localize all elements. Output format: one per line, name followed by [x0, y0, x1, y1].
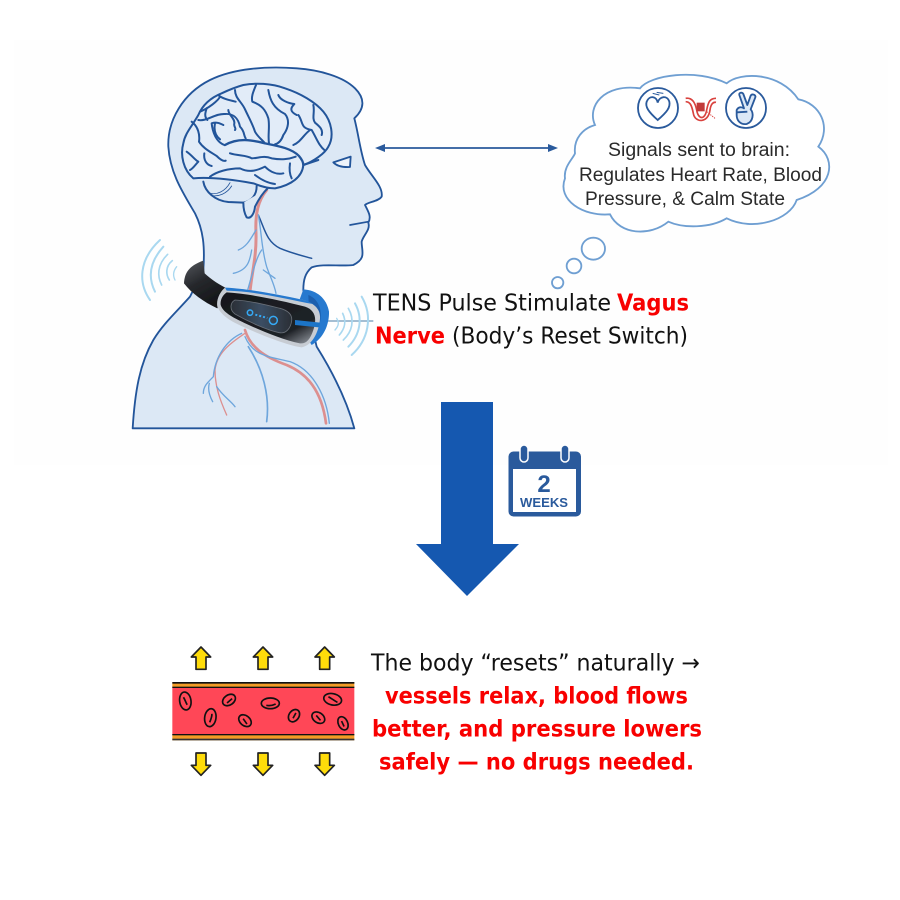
down arrows — [191, 753, 334, 775]
result text: The body “resets” naturally → — [370, 650, 700, 676]
vessel body — [172, 687, 354, 735]
big down arrow — [416, 402, 519, 596]
bubble text: Regulates Heart Rate, Blood — [579, 165, 822, 186]
connector line — [317, 319, 373, 322]
brain — [182, 84, 332, 218]
signal waves right — [335, 297, 368, 355]
icon: calendar 2 weeks: 2 — [537, 471, 551, 498]
blood vessel diagram — [172, 647, 354, 775]
icon: heart — [638, 88, 678, 128]
result text: safely — no drugs needed. — [379, 750, 694, 776]
device lights — [247, 310, 277, 324]
signal waves left — [142, 240, 177, 300]
neck device — [184, 261, 329, 347]
result text: vessels relax, blood flows — [385, 684, 688, 710]
double-headed arrow — [375, 144, 558, 152]
vagus nerve and vessels — [203, 190, 329, 423]
caption: TENS pulse: Nerve — [375, 324, 445, 350]
head silhouette — [133, 68, 382, 428]
illustration: head with brain, nerve and neck device — [133, 68, 382, 428]
caption: TENS pulse: TENS Pulse Stimulate — [372, 290, 611, 316]
bubble text: Pressure, & Calm State — [585, 189, 785, 210]
icon: calendar 2 weeks: WEEKS — [520, 495, 568, 510]
mouth and jaw lines — [258, 215, 368, 258]
icon: vessel — [686, 98, 716, 120]
caption: TENS pulse — [372, 290, 689, 350]
vessel walls — [172, 682, 354, 740]
bubble text — [579, 140, 822, 210]
cloud outline — [563, 75, 829, 232]
bubble text: Signals sent to brain: — [608, 140, 790, 161]
caption: TENS pulse: Vagus — [617, 290, 689, 316]
up arrows — [191, 647, 334, 669]
icon: calendar 2 weeks — [508, 445, 581, 516]
thought circles — [552, 238, 605, 288]
result text: better, and pressure lowers — [372, 716, 702, 742]
caption: TENS pulse: (Body’s Reset Switch) — [452, 324, 688, 350]
eye — [333, 157, 351, 167]
thought bubble — [552, 75, 829, 288]
icon: peace hand — [726, 88, 766, 128]
result text — [370, 650, 702, 776]
red blood cells — [178, 691, 350, 732]
